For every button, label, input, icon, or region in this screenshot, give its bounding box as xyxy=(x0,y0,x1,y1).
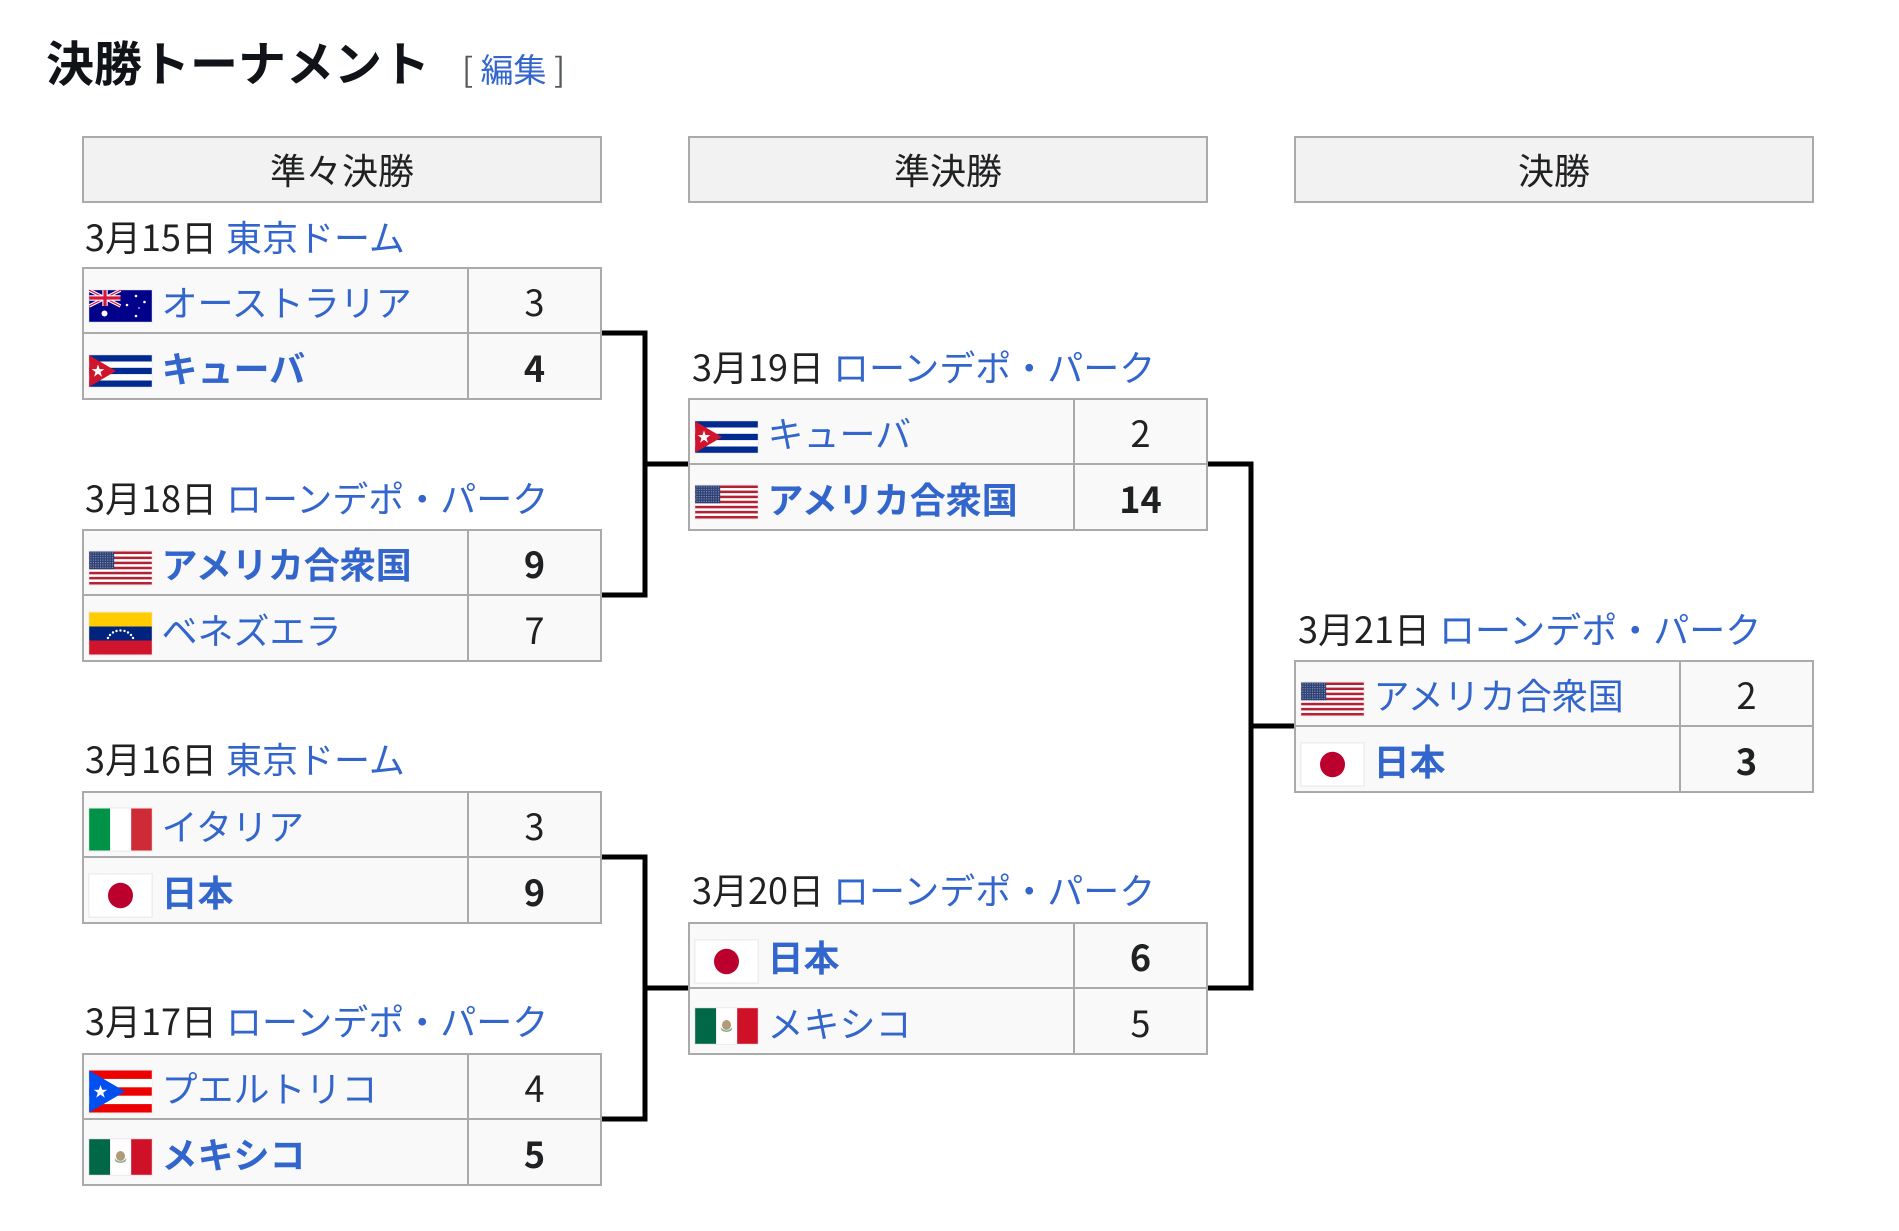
match: quarterfinal 1: オーストラリア xyxy=(162,274,412,326)
match: quarterfinal 3 xyxy=(82,732,602,924)
match: quarterfinal 1: 4 xyxy=(524,341,545,393)
match: semifinal 2: 3月20日 ローンデポ・パーク xyxy=(692,863,1155,915)
match: quarterfinal 2: 3月18日 ローンデポ・パーク xyxy=(85,471,548,523)
match: quarterfinal 2: 9 xyxy=(524,536,545,588)
match: final: 3月21日 ローンデポ・パーク xyxy=(1298,602,1761,654)
match: semifinal 1: 2 xyxy=(1130,406,1150,458)
match: semifinal 1: 3月19日 ローンデポ・パーク xyxy=(692,340,1155,392)
heading: semifinals: 準決勝 xyxy=(894,143,1002,195)
match: semifinal 1 xyxy=(688,340,1208,531)
match: quarterfinal 4: 5 xyxy=(524,1127,545,1179)
heading: final: 決勝 xyxy=(1518,143,1590,195)
match: quarterfinal 3: 9 xyxy=(524,865,545,917)
match: quarterfinal 4 xyxy=(82,994,602,1186)
match: semifinal 2: 日本 xyxy=(768,930,840,982)
match: semifinal 2: メキシコ xyxy=(768,996,912,1048)
heading: quarterfinals: 準々決勝 xyxy=(270,143,414,195)
match: semifinal 1: キューバ xyxy=(768,406,911,458)
match: quarterfinal 3: 3 xyxy=(524,798,544,850)
match: semifinal 2: 6 xyxy=(1130,930,1151,982)
match: final: 日本 xyxy=(1374,734,1446,786)
heading: semifinals xyxy=(688,136,1208,203)
match: quarterfinal 4: プエルトリコ xyxy=(162,1060,378,1112)
match: final: 3 xyxy=(1736,734,1757,786)
edit link: [ 編集 ] xyxy=(462,44,565,92)
heading: quarterfinals xyxy=(82,136,602,203)
title: 決勝トーナメント xyxy=(46,25,430,95)
match: quarterfinal 1: 3月15日 東京ドーム xyxy=(85,210,405,262)
match: quarterfinal 2: ベネズエラ xyxy=(162,603,342,655)
match: final: アメリカ合衆国 xyxy=(1374,668,1624,720)
match: quarterfinal 1: 3 xyxy=(524,274,544,326)
match: quarterfinal 1 xyxy=(82,210,602,400)
match: semifinal 1: 14 xyxy=(1119,472,1162,524)
match: quarterfinal 2: アメリカ合衆国 xyxy=(162,536,412,588)
match: quarterfinal 4: メキシコ xyxy=(162,1127,306,1179)
match: semifinal 2: 5 xyxy=(1130,996,1150,1048)
match: quarterfinal 4: 4 xyxy=(524,1060,544,1112)
match: semifinal 2 xyxy=(688,863,1208,1055)
match: quarterfinal 1: キューバ xyxy=(162,341,305,393)
match: quarterfinal 2: 7 xyxy=(524,603,544,655)
match: final: 2 xyxy=(1736,668,1756,720)
match: quarterfinal 3: イタリア xyxy=(162,798,304,850)
match: quarterfinal 3: 3月16日 東京ドーム xyxy=(85,732,405,784)
match: quarterfinal 3: 日本 xyxy=(162,865,234,917)
match: final xyxy=(1294,602,1814,793)
match: quarterfinal 4: 3月17日 ローンデポ・パーク xyxy=(85,994,548,1046)
heading: final xyxy=(1294,136,1814,203)
match: quarterfinal 2 xyxy=(82,471,602,662)
match: semifinal 1: アメリカ合衆国 xyxy=(768,472,1018,524)
